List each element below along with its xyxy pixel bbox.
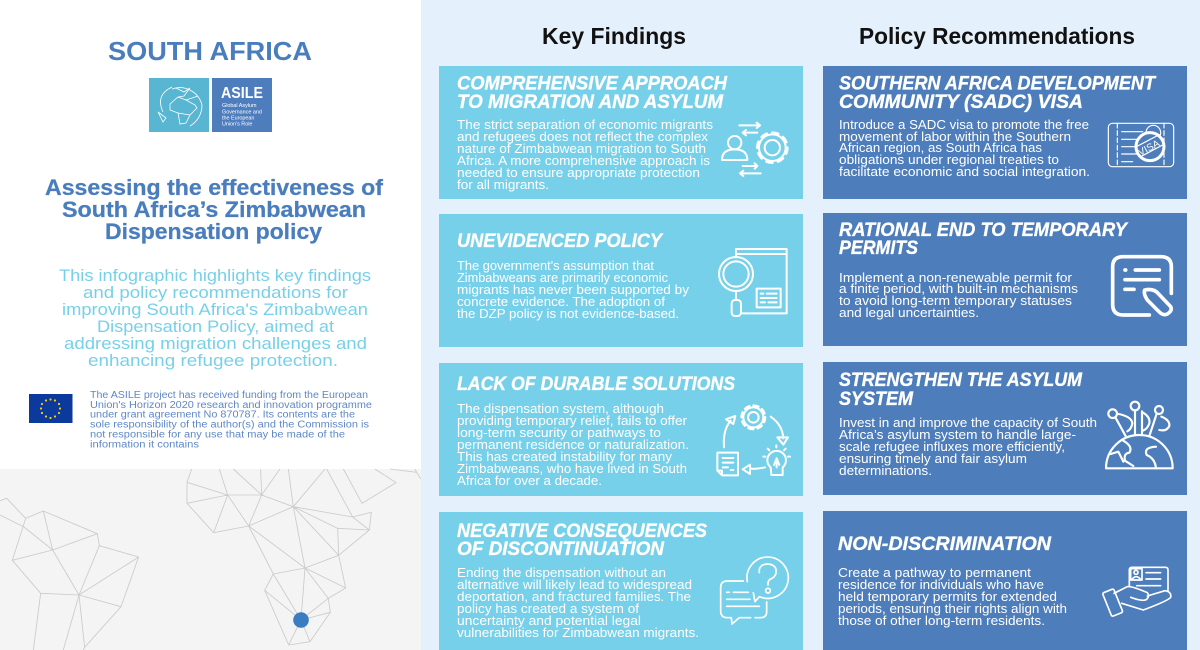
- ASILE logo: the European: [222, 116, 254, 122]
- funding disclaimer: Union's Horizon 2020 research and innovation programme: [90, 400, 372, 411]
- card heading: [839, 220, 1129, 259]
- funding disclaimer: information it contains: [90, 440, 199, 450]
- card text: permanent residence or naturalization.: [457, 438, 689, 452]
- heading: Key Findings: Key Findings: [542, 23, 686, 49]
- title: South Africa: SOUTH AFRICA: [108, 36, 312, 66]
- card heading: RATIONAL END TO TEMPORARY: [839, 220, 1129, 241]
- intro paragraph: enhancing refugee protection.: [88, 352, 338, 370]
- ASILE logo: Governance and: [222, 110, 262, 116]
- card text: uncertainty and potential legal: [457, 614, 641, 628]
- card text: obligations under regional treaties to: [839, 153, 1059, 167]
- card text: [457, 566, 699, 640]
- card text: facilitate economic and social integration.: [839, 165, 1090, 179]
- card text: concrete evidence. The adoption of: [457, 295, 666, 309]
- card text: vulnerabilities for Zimbabwean migrants.: [457, 626, 699, 640]
- card text: and legal uncertainties.: [839, 306, 979, 320]
- card text: [457, 402, 689, 488]
- card text: Ending the dispensation without an: [457, 566, 666, 580]
- map background: [0, 469, 421, 650]
- panel: rational end to temporary permits: [823, 213, 1187, 346]
- card text: Africa for over a decade.: [457, 474, 602, 488]
- card heading: OF DISCONTINUATION: [457, 539, 665, 560]
- card text: [457, 118, 713, 192]
- funding disclaimer: under grant agreement No 870787. Its contents are the: [90, 410, 355, 420]
- card heading: COMPREHENSIVE APPROACH: [457, 74, 728, 94]
- ASILE logo: Global Asylum: [222, 103, 257, 109]
- card text: [839, 416, 1097, 478]
- card text: alternative will likely lead to widespread: [457, 578, 692, 592]
- card text: held temporary permits for extended: [838, 590, 1057, 604]
- funding disclaimer: sole responsibility of the author(s) and the Commission is: [90, 420, 369, 430]
- subtitle heading: [45, 175, 384, 244]
- card text: African region, as South Africa has: [839, 141, 1042, 155]
- card text: movement of labor within the Southern: [839, 130, 1071, 144]
- intro paragraph: This infographic highlights key findings: [59, 267, 371, 285]
- ASILE logo: [149, 78, 272, 132]
- panel: lack of durable solutions: [439, 363, 803, 496]
- panel: comprehensive approach: [439, 66, 803, 199]
- subtitle heading: Dispensation policy: [105, 219, 323, 244]
- card text: needed to ensure appropriate protection: [457, 166, 700, 180]
- card text: This has created instability for many: [457, 450, 673, 464]
- intro paragraph: [59, 267, 371, 370]
- card text: policy has created a system of: [457, 602, 640, 616]
- card heading: STRENGTHEN THE ASYLUM: [839, 370, 1083, 391]
- location marker: [293, 612, 309, 628]
- card text: Africa’s asylum system to handle large-: [839, 428, 1076, 442]
- card heading: COMMUNITY (SADC) VISA: [839, 92, 1083, 113]
- card text: Zimbabweans are primarily economic: [457, 271, 668, 285]
- panel: strengthen the asylum system: [823, 362, 1187, 495]
- ASILE logo: Union's Role: [222, 122, 252, 128]
- subtitle heading: South Africa’s Zimbabwean: [62, 197, 366, 222]
- funding disclaimer: not responsible for any use that may be made of the: [90, 430, 345, 440]
- funding disclaimer: The ASILE project has received funding from the European: [90, 390, 368, 401]
- card heading: [457, 521, 707, 560]
- icon: visa stamp: [1108, 123, 1174, 167]
- card text: Zimbabweans, who have lived in South: [457, 462, 687, 476]
- icon: document and magnifier: [719, 249, 787, 316]
- icon: visa stamp: VISA: [1137, 138, 1162, 159]
- card text: deportation, and fractured families. The: [457, 590, 691, 604]
- card heading: TO MIGRATION AND ASYLUM: [457, 92, 724, 113]
- card heading: [839, 74, 1156, 113]
- subtitle heading: Assessing the effectiveness of: [45, 175, 384, 200]
- panel: non-discrimination: [823, 511, 1187, 650]
- card text: nature of Zimbabwean migration to South: [457, 142, 706, 156]
- intro paragraph: addressing migration challenges and: [64, 335, 367, 353]
- card text: [839, 271, 1078, 320]
- card heading: PERMITS: [839, 238, 918, 259]
- card text: a finite period, with built-in mechanisms: [839, 282, 1078, 296]
- card heading: UNEVIDENCED POLICY: [457, 231, 664, 252]
- card heading: NON-DISCRIMINATION: [838, 534, 1052, 555]
- card text: periods, ensuring their rights align with: [838, 602, 1067, 616]
- card text: The government's assumption that: [457, 259, 655, 273]
- card text: to avoid long-term temporary statuses: [839, 294, 1072, 308]
- icon: person, gear and arrows: [722, 123, 787, 176]
- icon: speech bubbles with question mark: [721, 557, 788, 624]
- left panel: [0, 0, 421, 650]
- heading: Policy Recommendations: Policy Recommendations: [859, 23, 1135, 49]
- card text: migrants has never been supported by: [457, 283, 690, 297]
- card text: determinations.: [839, 464, 932, 478]
- card text: [839, 118, 1090, 179]
- card text: The strict separation of economic migrants: [457, 118, 713, 132]
- funding disclaimer: [90, 390, 372, 450]
- right background: [421, 0, 1200, 650]
- card text: The dispensation system, although: [457, 402, 664, 416]
- card text: [838, 566, 1067, 628]
- card text: Africa. A more comprehensive approach is: [457, 154, 710, 168]
- icon: hand holding ID card: [1102, 567, 1171, 617]
- card text: [457, 259, 690, 321]
- card text: the DZP policy is not evidence-based.: [457, 307, 679, 321]
- panel: negative consequences: [439, 512, 803, 650]
- intro paragraph: improving South Africa's Zimbabwean: [62, 301, 368, 319]
- EU flag: [29, 394, 72, 423]
- card text: those of other long-term residents.: [838, 614, 1045, 628]
- card heading: LACK OF DURABLE SOLUTIONS: [457, 374, 735, 395]
- card text: Implement a non-renewable permit for: [839, 271, 1072, 285]
- icon: globe with pins: [1106, 402, 1173, 468]
- card text: long-term security or pathways to: [457, 426, 661, 440]
- card text: ensuring timely and fair asylum: [839, 452, 1027, 466]
- icon: form and pencil: [1113, 257, 1171, 315]
- card heading: SYSTEM: [839, 389, 914, 410]
- icon: cycle of gear, bulb and document: [717, 406, 790, 475]
- card heading: [839, 370, 1083, 410]
- intro paragraph: Dispensation Policy, aimed at: [97, 318, 334, 336]
- panel: unevidenced policy: [439, 214, 803, 347]
- ASILE logo: ASILE: [221, 85, 263, 102]
- card text: scale refugee influxes more efficiently,: [839, 440, 1065, 454]
- card text: providing temporary relief, fails to offer: [457, 414, 687, 428]
- card text: residence for individuals who have: [838, 578, 1044, 592]
- card heading: NEGATIVE CONSEQUENCES: [457, 521, 707, 542]
- card text: for all migrants.: [457, 178, 549, 192]
- card heading: SOUTHERN AFRICA DEVELOPMENT: [839, 74, 1156, 94]
- card text: and refugees does not reflect the complex: [457, 130, 709, 144]
- card text: Create a pathway to permanent: [838, 566, 1032, 580]
- card heading: [457, 74, 728, 113]
- card text: Introduce a SADC visa to promote the free: [839, 118, 1089, 132]
- panel: SADC visa: [823, 66, 1187, 199]
- intro paragraph: and policy recommendations for: [83, 284, 349, 302]
- card text: Invest in and improve the capacity of South: [839, 416, 1097, 430]
